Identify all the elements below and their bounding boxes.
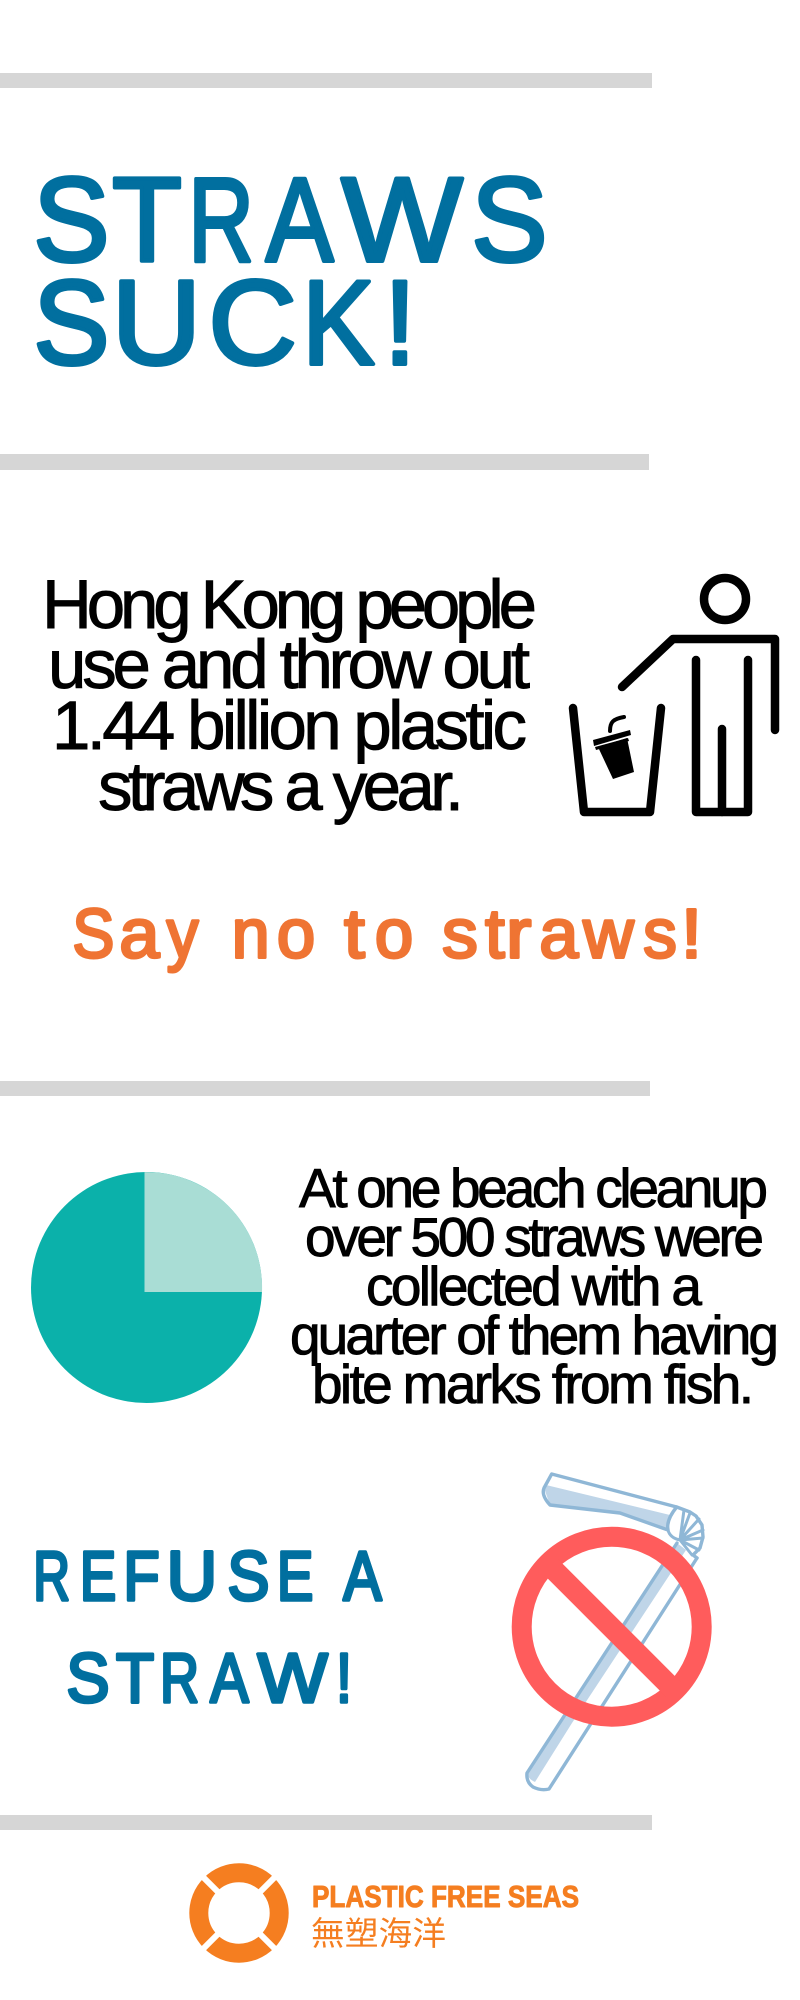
heading line 1: E (80, 1537, 116, 1615)
callout: Say no to straws!: o (277, 895, 315, 973)
callout: Say no to straws!: r (506, 895, 531, 973)
callout: Say no to straws!: s (643, 895, 677, 973)
heading: REFUSE A STRAW! (33, 1537, 382, 1717)
heading line 2: ! (336, 1639, 352, 1717)
callout: Say no to straws!: S (72, 895, 114, 973)
heading line 1: U (167, 1537, 217, 1615)
title line 1: R (188, 153, 254, 287)
callout: Say no to straws!: t (485, 895, 505, 973)
heading line 1: S (227, 1537, 270, 1615)
text block: Hong Kong straw statistic: 1.44 billion plastic (52, 687, 527, 764)
logo: Plastic Free Seas (199, 1873, 579, 1953)
icon: person throwing a cup in a bin (573, 578, 775, 812)
icon: straw (527, 1474, 703, 1790)
title line 1: S (471, 153, 548, 287)
text block: beach cleanup statistic: bite marks from fish. (312, 1353, 754, 1415)
text block: beach cleanup statistic: collected with a (366, 1255, 702, 1317)
icon: bin (573, 708, 661, 812)
pie chart: a quarter of straws with bite marks (31, 1172, 262, 1403)
title line 1: W (341, 153, 463, 287)
callout: Say no to straws!: w (582, 895, 634, 973)
heading line 2: T (116, 1639, 154, 1717)
logo text: Chinese name: 無塑海洋 (311, 1915, 446, 1952)
title line 2: U (112, 256, 201, 390)
text block: beach cleanup statistic: over 500 straws were (305, 1206, 764, 1268)
title line 2: S (33, 256, 110, 390)
callout: Say no to straws!: y (167, 895, 198, 973)
title line 1: A (266, 153, 333, 287)
callout: Say no to straws!: t (344, 895, 365, 973)
title line 2: C (208, 256, 297, 390)
text block: Hong Kong straw statistic: use and throw out (48, 626, 530, 703)
callout: Say no to straws!: o (375, 895, 413, 973)
title line 2: ! (384, 256, 416, 390)
title: STRAWS SUCK! (33, 153, 547, 390)
icon: life ring (199, 1873, 279, 1953)
heading line 1: E (277, 1537, 313, 1615)
heading line 2: A (210, 1639, 249, 1717)
callout: Say no to straws!: a (539, 895, 578, 973)
text block: Hong Kong straw statistic: Hong Kong people (42, 566, 537, 643)
title line 1: S (33, 153, 110, 287)
heading line 2: R (160, 1639, 199, 1717)
callout: Say no to straws!: s (442, 895, 478, 973)
title line 2: K (302, 256, 375, 390)
heading line 1: A (343, 1537, 382, 1615)
icon: person (622, 578, 775, 812)
text block: beach cleanup statistic: At one beach cleanup (299, 1157, 768, 1219)
heading line 1: R (33, 1537, 70, 1615)
title line 1: T (112, 153, 182, 287)
icon: cup with straw (593, 717, 634, 779)
heading line 2: S (66, 1639, 110, 1717)
callout: Say no to straws!: a (119, 895, 159, 973)
icon: crossed-out bendy straw (522, 1474, 703, 1790)
text block: Hong Kong straw statistic: straws a year. (98, 748, 464, 825)
text block: beach cleanup statistic (290, 1157, 779, 1415)
heading line 1: F (123, 1537, 160, 1615)
callout: Say no to straws!: ! (681, 895, 702, 973)
text block: Hong Kong straw statistic (42, 566, 537, 825)
text block: beach cleanup statistic: quarter of them having (290, 1304, 779, 1366)
icon: prohibition sign (522, 1537, 702, 1717)
heading line 2: W (258, 1639, 328, 1717)
logo text: English name: PLASTIC FREE SEAS (312, 1879, 579, 1914)
callout: Say no to straws!: n (232, 895, 270, 973)
